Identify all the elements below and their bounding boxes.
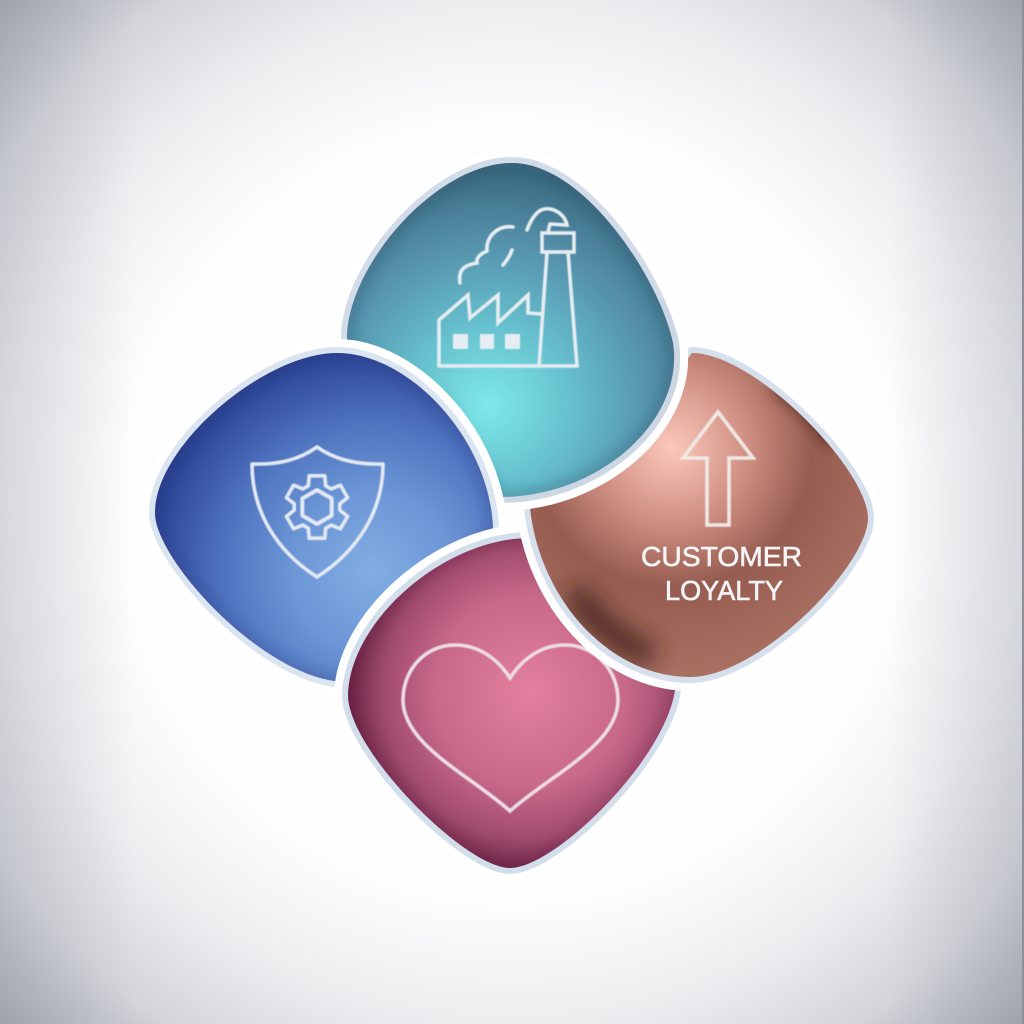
label: customer loyalty: LOYALTY <box>665 575 783 606</box>
petal: teal <box>347 163 674 497</box>
label: customer loyalty <box>641 541 802 606</box>
icon: shield with gear <box>252 447 383 577</box>
icon: heart <box>403 645 618 811</box>
icon: factory <box>439 209 577 366</box>
icon: up arrow <box>683 412 753 525</box>
petal: teal overlap over rust <box>505 300 688 510</box>
petal: pink <box>348 538 678 868</box>
label: customer loyalty: CUSTOMER <box>641 541 802 572</box>
petal: rust <box>530 353 868 677</box>
petal: blue <box>155 353 493 682</box>
